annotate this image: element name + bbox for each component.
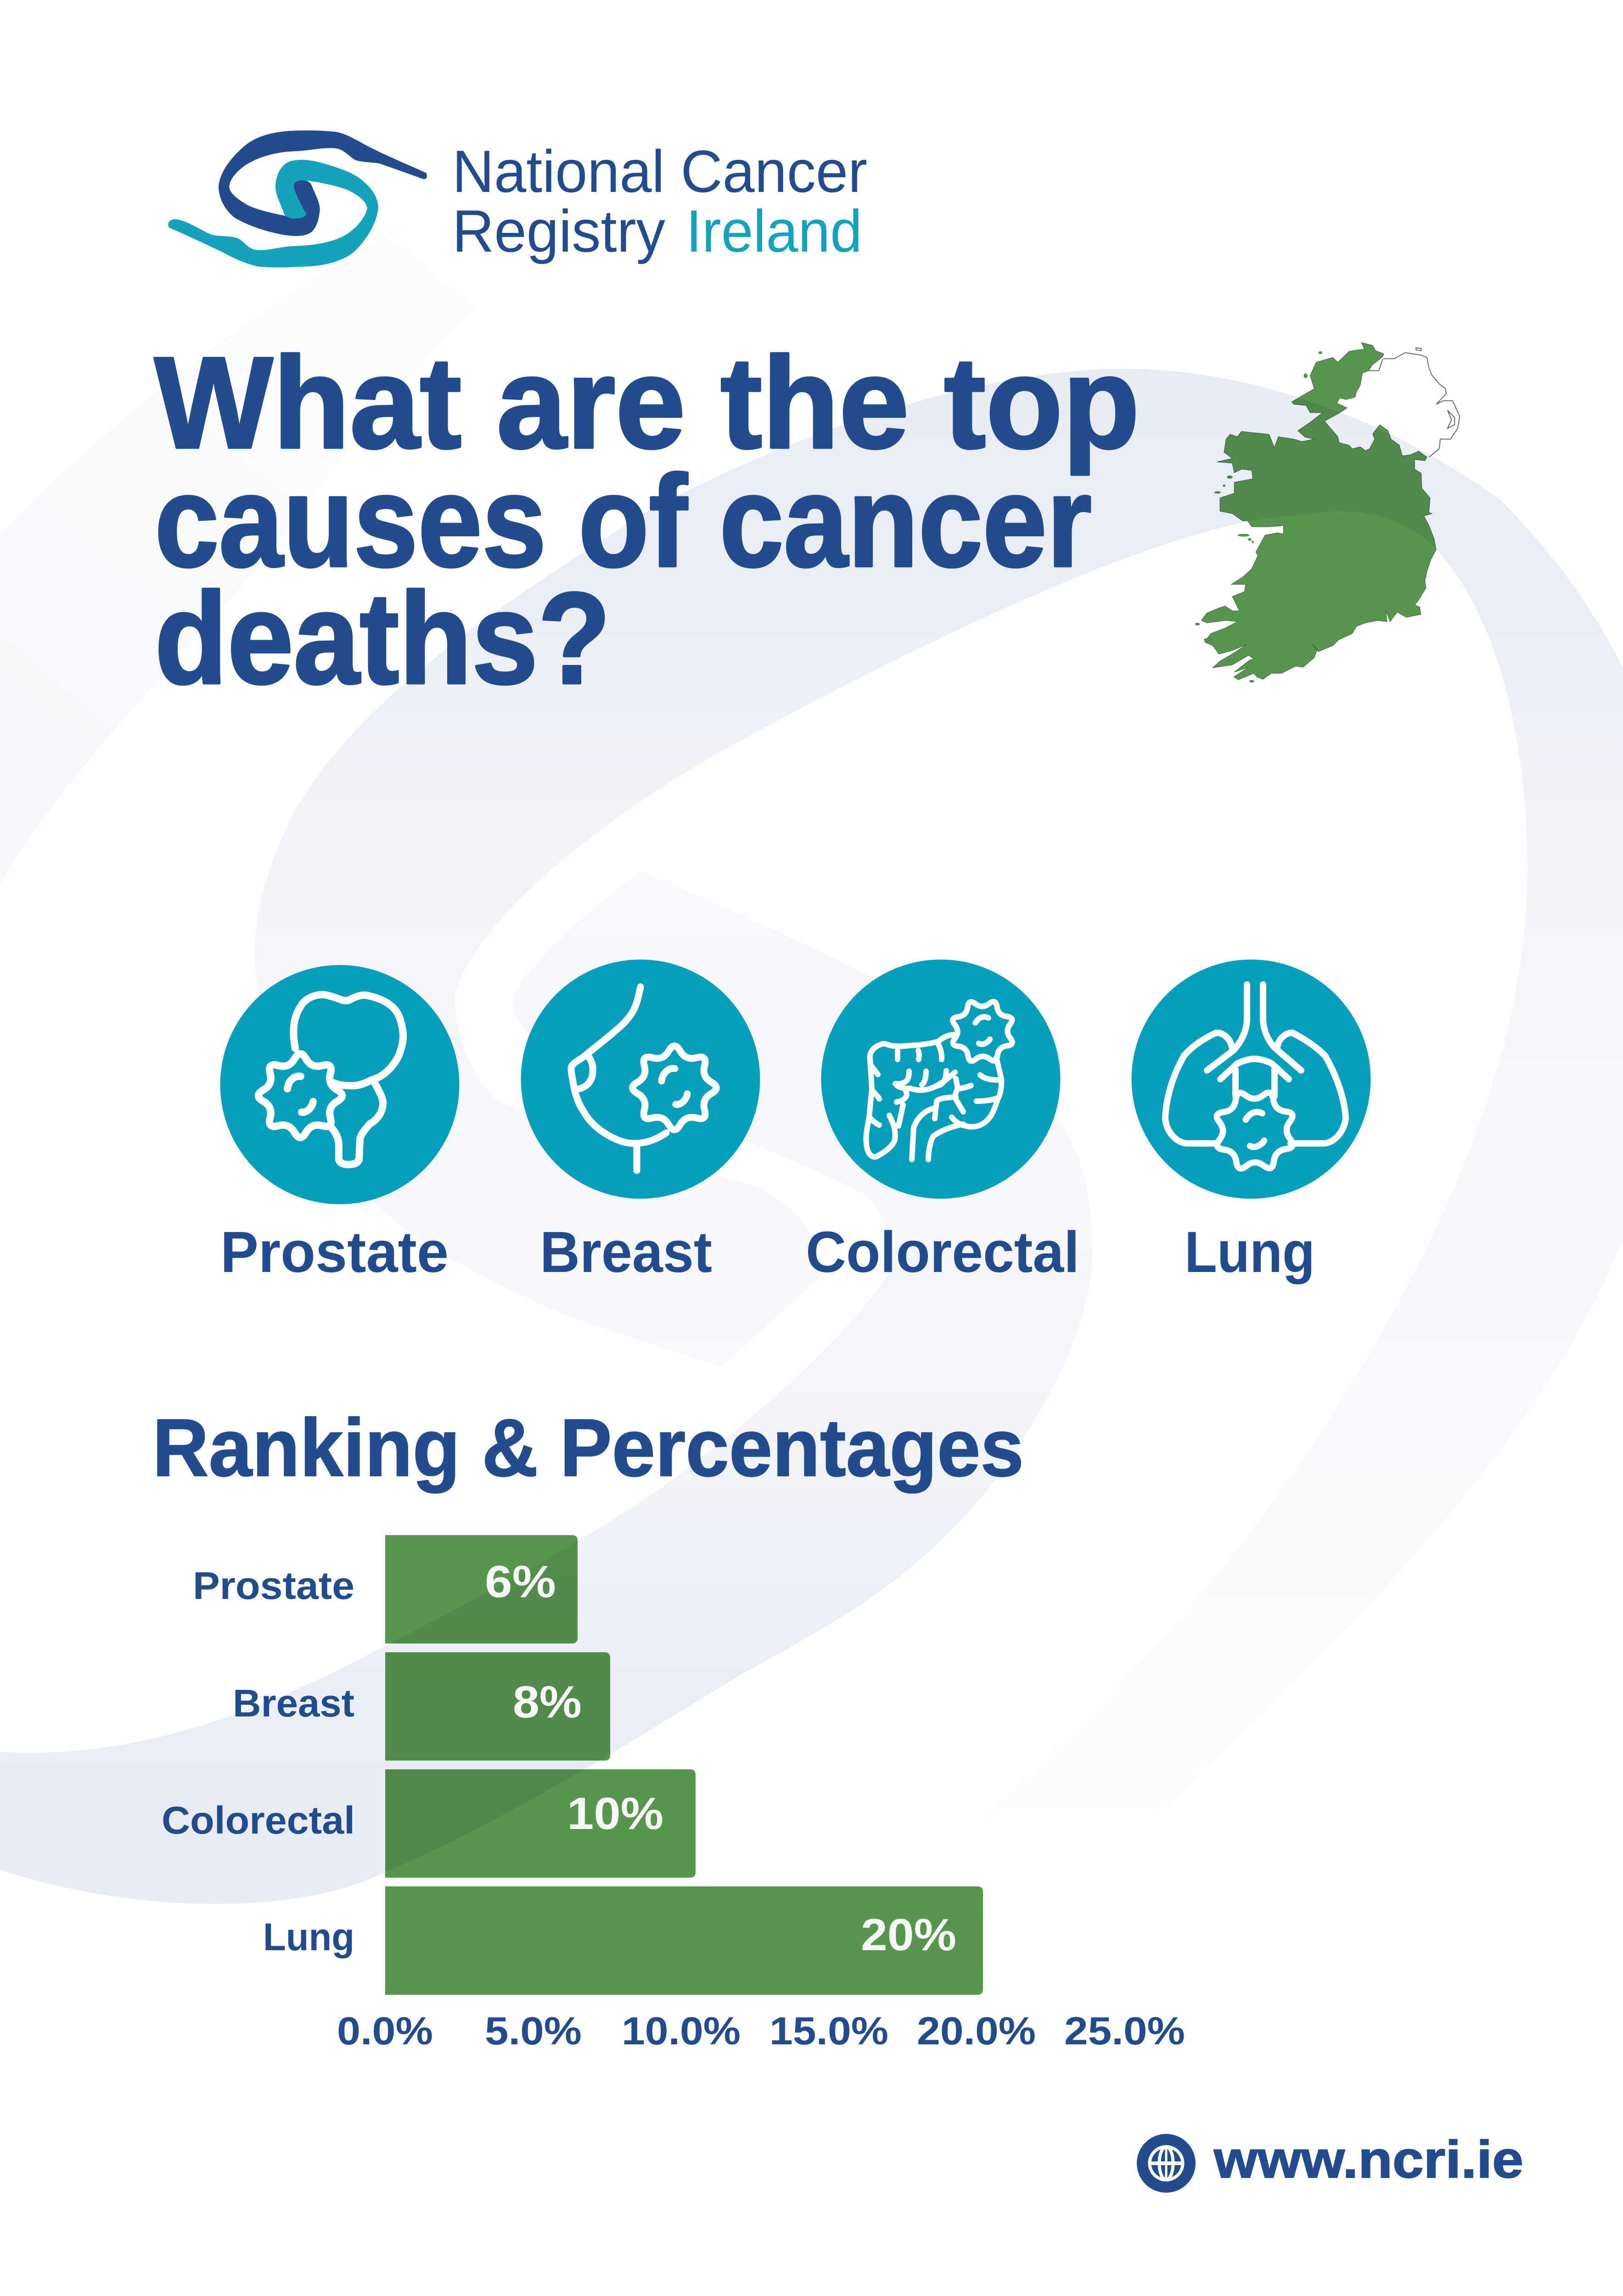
map of Ireland — [1195, 343, 1460, 682]
title: deaths? — [155, 566, 611, 711]
x axis: 25.0% — [1064, 2009, 1185, 2053]
category labels — [162, 1564, 355, 1958]
icon: globe — [1137, 2134, 1196, 2193]
cancer type labels: Colorectal — [806, 1220, 1079, 1284]
x axis: 5.0% — [485, 2009, 582, 2053]
category labels: Colorectal — [162, 1799, 355, 1842]
value labels: 10% — [567, 1788, 663, 1839]
category labels: Prostate — [193, 1564, 354, 1607]
title: What are the top — [154, 330, 1140, 476]
website url: www.ncri.ie — [1213, 2131, 1523, 2189]
x axis: 0.0% — [337, 2009, 433, 2053]
heading: ranking and percentages: Ranking & Percentages — [152, 1402, 1024, 1493]
Republic of Ireland — [1195, 343, 1436, 682]
Northern Ireland outline — [1369, 348, 1460, 457]
logo text: Ireland — [686, 197, 862, 264]
cancer type labels — [220, 1220, 1315, 1284]
value labels: 8% — [513, 1677, 582, 1727]
x axis: 10.0% — [622, 2009, 741, 2053]
x axis — [337, 2009, 1185, 2053]
value labels — [485, 1556, 956, 1960]
value labels: 6% — [485, 1556, 556, 1607]
bars — [385, 1535, 983, 1995]
website footer — [1137, 2131, 1523, 2193]
category labels: Lung — [263, 1915, 354, 1958]
title — [154, 330, 1140, 711]
icon: prostate — [220, 965, 459, 1204]
cancer type labels: Breast — [540, 1220, 712, 1284]
title: causes of cancer — [155, 449, 1092, 594]
logo text: Registry — [452, 197, 665, 264]
logo: National Cancer Registry Ireland — [168, 130, 867, 267]
icon: lung — [1131, 960, 1371, 1199]
icon: colorectal — [821, 960, 1061, 1199]
x axis: 15.0% — [769, 2009, 888, 2053]
cancer type labels: Lung — [1185, 1220, 1315, 1284]
x axis: 20.0% — [917, 2009, 1036, 2053]
category labels: Breast — [233, 1682, 354, 1725]
value labels: 20% — [861, 1909, 956, 1960]
logo text: National Cancer — [452, 138, 867, 205]
icon: breast — [521, 960, 760, 1199]
cancer type labels: Prostate — [220, 1220, 449, 1284]
logo mark — [168, 130, 427, 267]
bar chart — [162, 1535, 1185, 2053]
logo text — [452, 138, 867, 264]
